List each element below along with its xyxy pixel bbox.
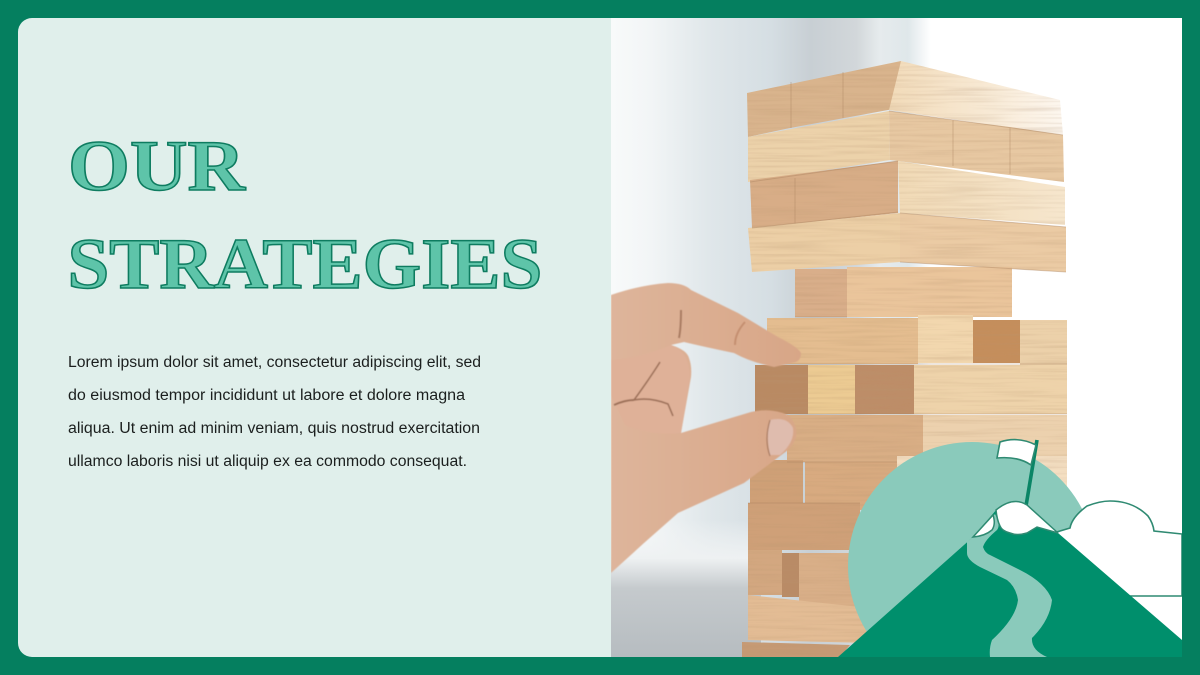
body text: aliqua. Ut enim ad minim veniam, quis nostrud exercitation: [68, 420, 480, 437]
body text: Lorem ipsum dolor sit amet, consectetur adipiscing elit, sed: [68, 354, 481, 371]
block joints: [748, 72, 1067, 503]
illustration: mountain with flag, sun and cloud: [838, 440, 1182, 675]
title line: STRATEGIES: STRATEGIES: [68, 223, 542, 304]
small snow patch: [973, 515, 994, 537]
body text: ullamco laboris nisi ut aliquip ex ea commodo consequat.: [68, 453, 467, 470]
body text: do eiusmod tempor incididunt ut labore et dolore magna: [68, 387, 465, 404]
title: [68, 126, 542, 304]
body text: [68, 354, 481, 470]
snow cap: [996, 501, 1058, 534]
sun circle: [848, 442, 1082, 632]
flag pole: [1026, 440, 1037, 506]
hand: [611, 283, 801, 573]
cloud: [1050, 501, 1182, 596]
flag: [997, 440, 1036, 465]
title line: OUR: OUR: [68, 126, 246, 206]
photo: hand pulling block from wooden tower: [611, 18, 1182, 657]
winding path: [967, 514, 1052, 657]
mountain body: [838, 501, 1182, 657]
panel: text background: [18, 18, 612, 657]
